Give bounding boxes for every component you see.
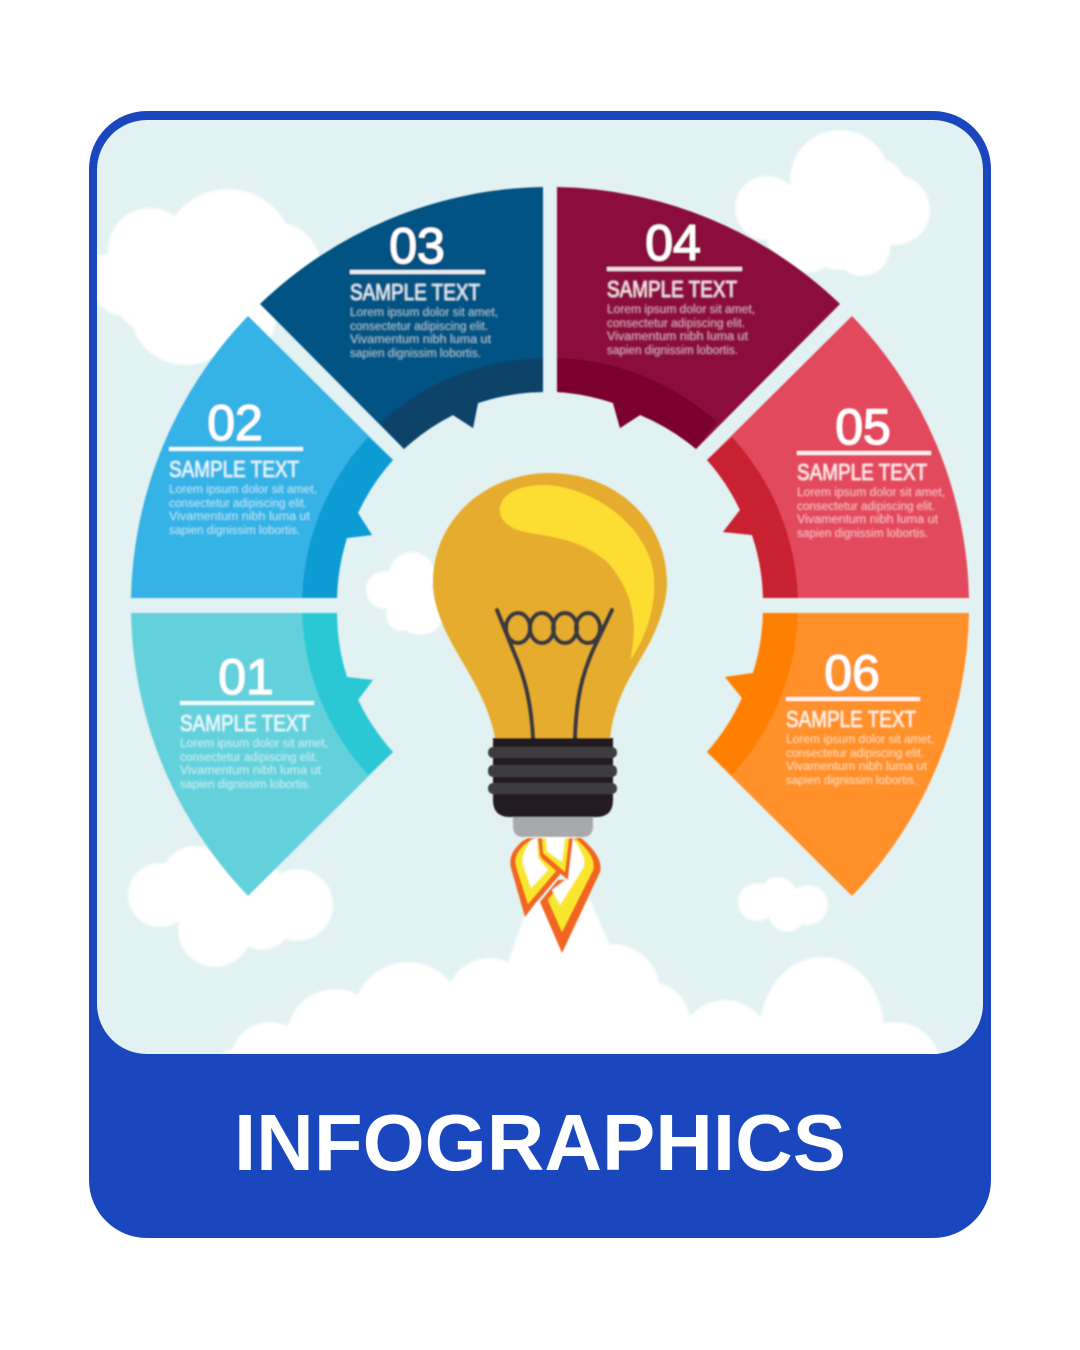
clouds xyxy=(91,130,945,1114)
segment 04 text: SAMPLE TEXT xyxy=(607,276,737,302)
segment 03 text: Vivamentum nibh luma ut xyxy=(350,334,492,346)
segment 06 text: Vivamentum nibh luma ut xyxy=(786,761,928,773)
segment 04 text: Vivamentum nibh luma ut xyxy=(607,331,749,343)
segment 01 text xyxy=(180,649,328,791)
segment 06 text: SAMPLE TEXT xyxy=(786,706,916,732)
segment 02 text: SAMPLE TEXT xyxy=(169,456,299,482)
segment 05 text: Vivamentum nibh luma ut xyxy=(797,514,939,526)
icon: rocket light bulb xyxy=(433,473,667,953)
segment 03 text: consectetur adipiscing elit. xyxy=(350,321,488,333)
segment 01 text: consectetur adipiscing elit. xyxy=(180,752,318,764)
base threads xyxy=(488,747,617,794)
segment 01 xyxy=(131,613,393,896)
segment 06 text xyxy=(786,645,934,787)
segment 06 text: Lorem ipsum dolor sit amet, xyxy=(786,734,934,746)
segment 01 shape xyxy=(131,613,393,896)
segment 02 xyxy=(131,316,393,598)
segment 04 xyxy=(557,187,840,449)
segment 02 inner band xyxy=(302,437,393,598)
illustration panel xyxy=(91,120,983,1114)
segment 05 text: 05 xyxy=(835,399,891,455)
segment 04 inner band xyxy=(557,358,717,449)
segment 05 text: Lorem ipsum dolor sit amet, xyxy=(797,487,945,499)
segment 06 text: 06 xyxy=(824,645,880,701)
title: INFOGRAPHICS xyxy=(234,1098,846,1187)
segment 05 inner band xyxy=(707,437,798,598)
rocket flames xyxy=(510,837,601,953)
screw base xyxy=(493,738,613,817)
six arc segments xyxy=(131,187,969,896)
segment 03 text: 03 xyxy=(389,218,445,274)
segment 02 text xyxy=(169,395,317,537)
segment 05 text: SAMPLE TEXT xyxy=(797,459,927,485)
segment 01 text: Lorem ipsum dolor sit amet, xyxy=(180,738,328,750)
segment 01 text: SAMPLE TEXT xyxy=(180,710,310,736)
segment 03 text: Lorem ipsum dolor sit amet, xyxy=(350,307,498,319)
segment 06 text: sapien dignissim lobortis. xyxy=(786,775,917,787)
segment 04 text xyxy=(607,215,755,357)
sky background xyxy=(97,120,983,1054)
segment 01 text: sapien dignissim lobortis. xyxy=(180,779,311,791)
blue card frame xyxy=(89,111,991,1238)
segment 05 text xyxy=(797,399,945,540)
segment 04 text: Lorem ipsum dolor sit amet, xyxy=(607,304,755,316)
segment 02 text: 02 xyxy=(207,395,263,451)
segment 02 text: consectetur adipiscing elit. xyxy=(169,498,307,510)
segment 06 shape xyxy=(707,613,969,896)
segment 05 text: sapien dignissim lobortis. xyxy=(797,528,928,540)
segment 05 text: consectetur adipiscing elit. xyxy=(797,501,935,513)
segment 04 text: consectetur adipiscing elit. xyxy=(607,318,745,330)
segment 06 inner band xyxy=(707,613,798,775)
bulb highlight xyxy=(500,485,654,660)
bulb glass xyxy=(433,473,667,738)
segment 06 xyxy=(707,613,969,896)
segment 02 text: sapien dignissim lobortis. xyxy=(169,525,300,537)
segment 03 shape xyxy=(260,187,543,449)
segment 02 shape xyxy=(131,316,393,598)
segment 05 xyxy=(707,316,969,598)
segment 04 text: sapien dignissim lobortis. xyxy=(607,345,738,357)
segment 01 inner band xyxy=(302,613,393,775)
segment 03 text: sapien dignissim lobortis. xyxy=(350,348,481,360)
segment 06 text: consectetur adipiscing elit. xyxy=(786,748,924,760)
segment 01 text: Vivamentum nibh luma ut xyxy=(180,765,322,777)
segment 04 shape xyxy=(557,187,840,449)
infographic card xyxy=(89,111,991,1238)
segment 03 xyxy=(260,187,543,449)
segment 03 inner band xyxy=(380,358,543,449)
segment 02 text: Vivamentum nibh luma ut xyxy=(169,511,311,523)
segment 01 text: 01 xyxy=(218,649,274,705)
segment 03 text xyxy=(350,218,498,360)
segment 05 shape xyxy=(707,316,969,598)
segment 04 text: 04 xyxy=(645,215,701,271)
segment 03 text: SAMPLE TEXT xyxy=(350,279,480,305)
filament xyxy=(497,610,612,738)
grey nozzle xyxy=(513,815,593,837)
segment 02 text: Lorem ipsum dolor sit amet, xyxy=(169,484,317,496)
